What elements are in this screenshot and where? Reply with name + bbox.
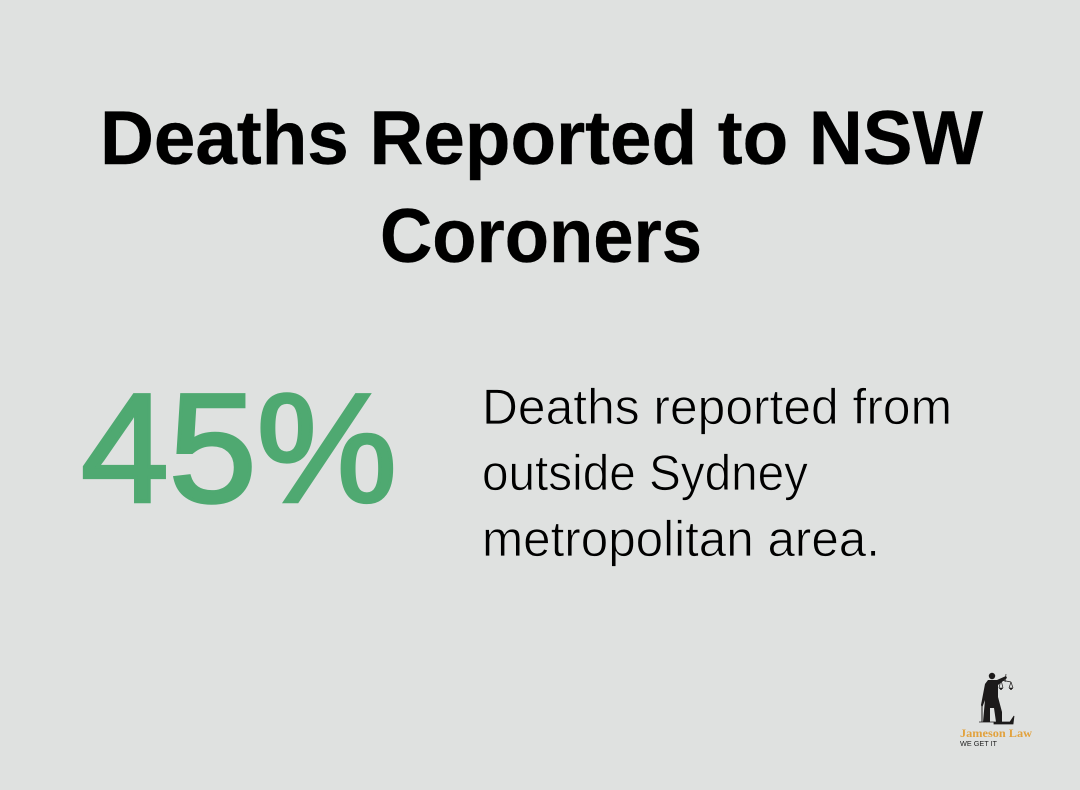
logo: Jameson Law (960, 673, 1033, 748)
statistic description (482, 379, 952, 567)
statistic description: outside Sydney (482, 445, 808, 501)
title (100, 96, 983, 279)
logo name: Jameson Law (960, 728, 1033, 740)
title: Coroners (380, 194, 702, 279)
big statistic: 45%: 45% (81, 362, 397, 534)
statistic description: Deaths reported from (482, 379, 952, 435)
title: Deaths Reported to NSW (100, 96, 983, 181)
logo tagline: WE GET IT (960, 739, 997, 748)
statistic description: metropolitan area. (482, 511, 880, 567)
icon: lady justice with L (979, 673, 1014, 724)
